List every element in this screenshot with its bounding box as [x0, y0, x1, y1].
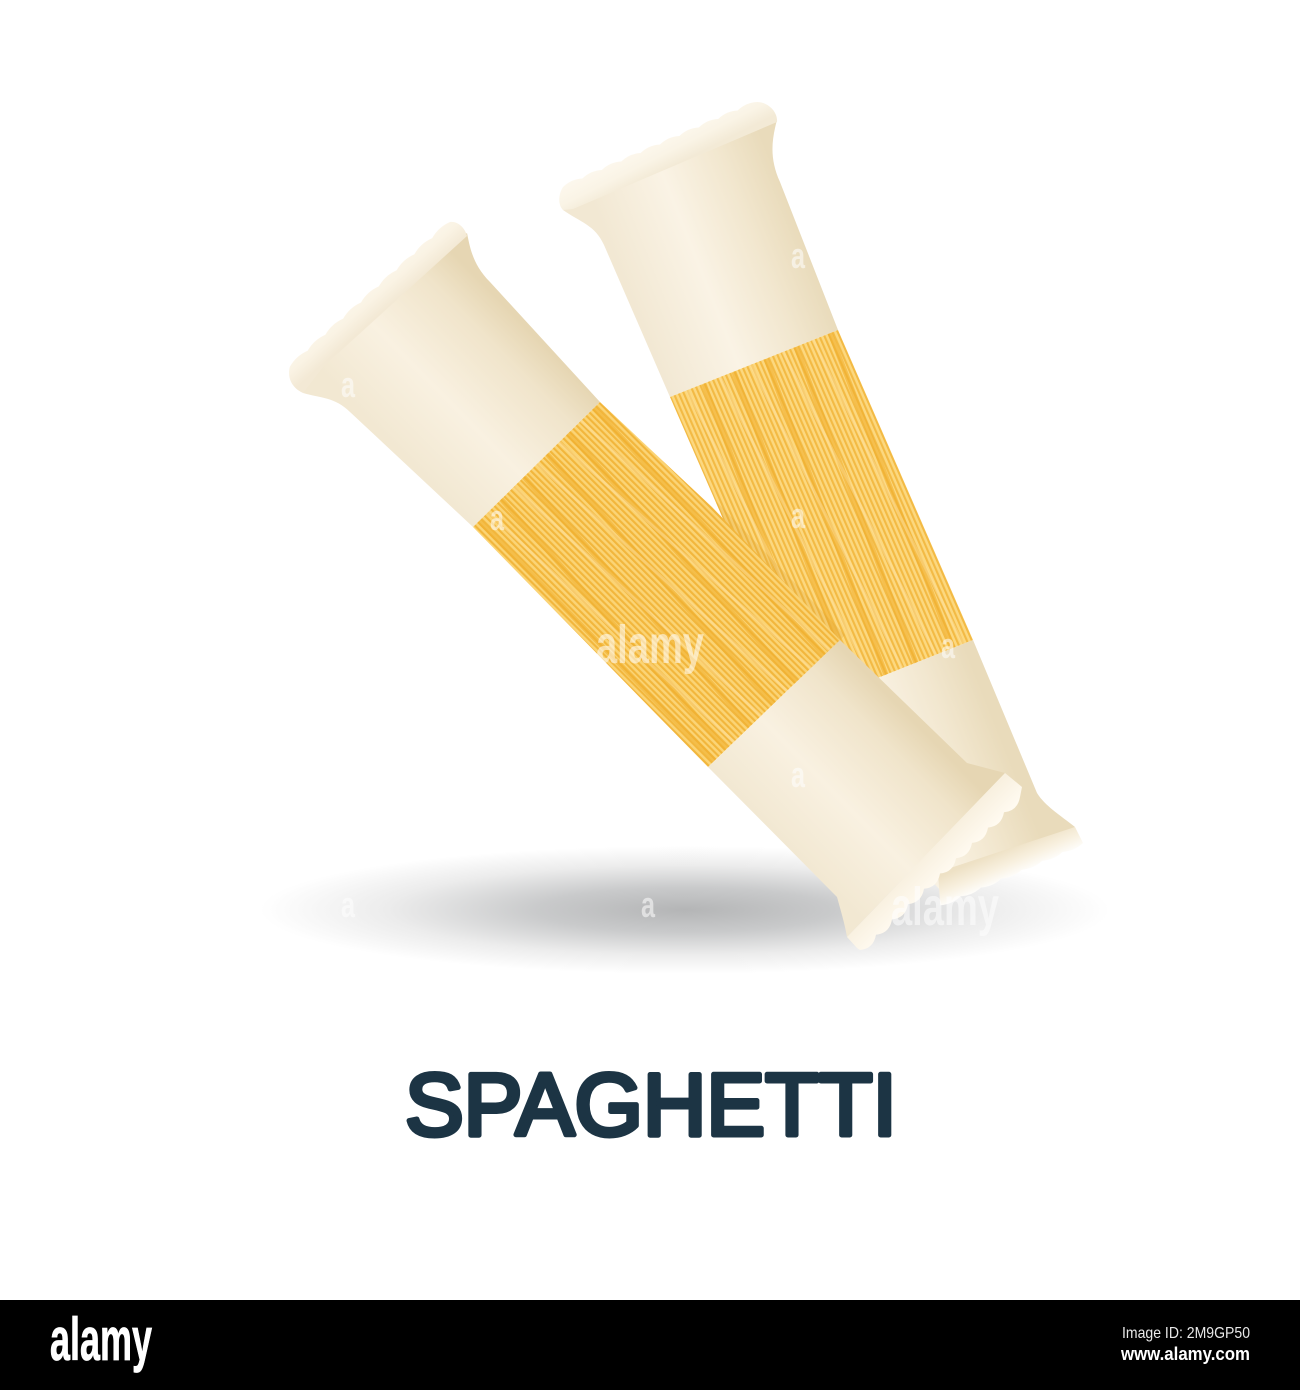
- spaghetti package: front left: [289, 222, 1022, 950]
- watermark letters: small marks: a: [941, 625, 956, 666]
- crimped seal: right package top: [559, 102, 777, 210]
- spaghetti strands: right package: [670, 330, 973, 684]
- watermark letters: small marks: a: [641, 884, 656, 925]
- watermark letters: small marks: a: [791, 235, 806, 276]
- footer logo: alamy: [50, 1306, 152, 1373]
- watermark letters: small marks: a: [341, 364, 356, 405]
- watermark letters: small marks: a: [791, 754, 806, 795]
- crimped seal: left package top: [289, 222, 467, 393]
- wrapper: left package upper sleeve: [303, 233, 600, 527]
- ground shadow: [260, 846, 1110, 974]
- watermark letters: small marks: a: [791, 495, 806, 536]
- wrapper: right package upper sleeve: [563, 120, 838, 397]
- title: SPAGHETTI: [405, 1055, 897, 1154]
- website: www.alamy.com: [1120, 1344, 1250, 1364]
- watermark text: lower right: alamy: [891, 877, 999, 937]
- watermark text: centre: alamy: [596, 615, 704, 675]
- watermark letters: small marks: [341, 235, 956, 925]
- watermark letters: small marks: a: [490, 497, 505, 538]
- image id: Image ID: 2M9GP50: [1122, 1325, 1250, 1342]
- spaghetti package: back right: [559, 102, 1083, 905]
- watermark: alamy: [341, 235, 999, 937]
- spaghetti strands: left package: [465, 395, 850, 775]
- watermark letters: small marks: a: [341, 884, 356, 925]
- wrapper: left package lower sleeve: [708, 640, 1005, 937]
- crimped seal: left package bottom: [847, 773, 1022, 950]
- wrapper: right package lower sleeve: [805, 640, 1075, 890]
- footer background: [0, 1300, 1300, 1390]
- footer bar: [0, 1300, 1300, 1390]
- crimped seal: right package bottom: [938, 827, 1083, 905]
